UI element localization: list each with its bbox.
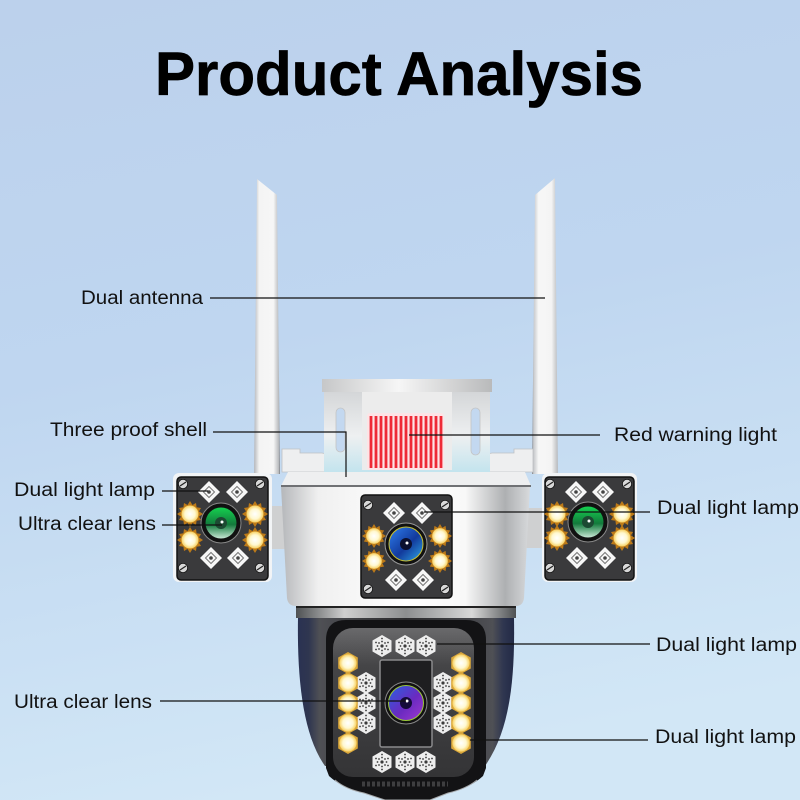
callout: upper front dual light lamp: Dual light lamp	[656, 635, 797, 656]
callout: dual antenna: Dual antenna	[81, 288, 203, 309]
right elbow connector	[482, 449, 533, 472]
right antenna	[532, 178, 558, 474]
title: Product Analysis	[155, 40, 643, 108]
right side camera module	[542, 473, 637, 582]
callout: right dual light lamp: Dual light lamp	[657, 498, 799, 519]
callout: three proof shell: Three proof shell	[50, 420, 207, 441]
lens window	[380, 660, 432, 747]
red warning light	[367, 413, 444, 470]
callout: front ultra clear lens: Ultra clear lens	[14, 692, 152, 713]
callout: three proof shell	[50, 420, 346, 477]
dark lower dome	[298, 618, 514, 800]
right pivot	[522, 508, 544, 548]
left module lens	[201, 503, 241, 543]
centre module lens	[385, 523, 427, 565]
metal ring	[296, 606, 516, 618]
lower lamp array	[338, 635, 471, 773]
callout: left dual light lamp: Dual light lamp	[14, 480, 155, 501]
callout: lower front dual light lamp: Dual light lamp	[655, 727, 796, 748]
centre camera module	[361, 495, 452, 598]
callout: left ultra clear lens: Ultra clear lens	[18, 514, 156, 535]
right module lens	[568, 502, 608, 542]
camera illustration	[173, 178, 637, 800]
callout: red warning light: Red warning light	[614, 425, 778, 446]
top mounting bracket	[322, 379, 492, 472]
lower lens	[385, 682, 427, 724]
left elbow connector	[282, 449, 332, 472]
left pivot	[270, 506, 288, 549]
left antenna	[254, 179, 280, 474]
silver upper body	[281, 472, 531, 606]
left side camera module	[173, 473, 272, 582]
